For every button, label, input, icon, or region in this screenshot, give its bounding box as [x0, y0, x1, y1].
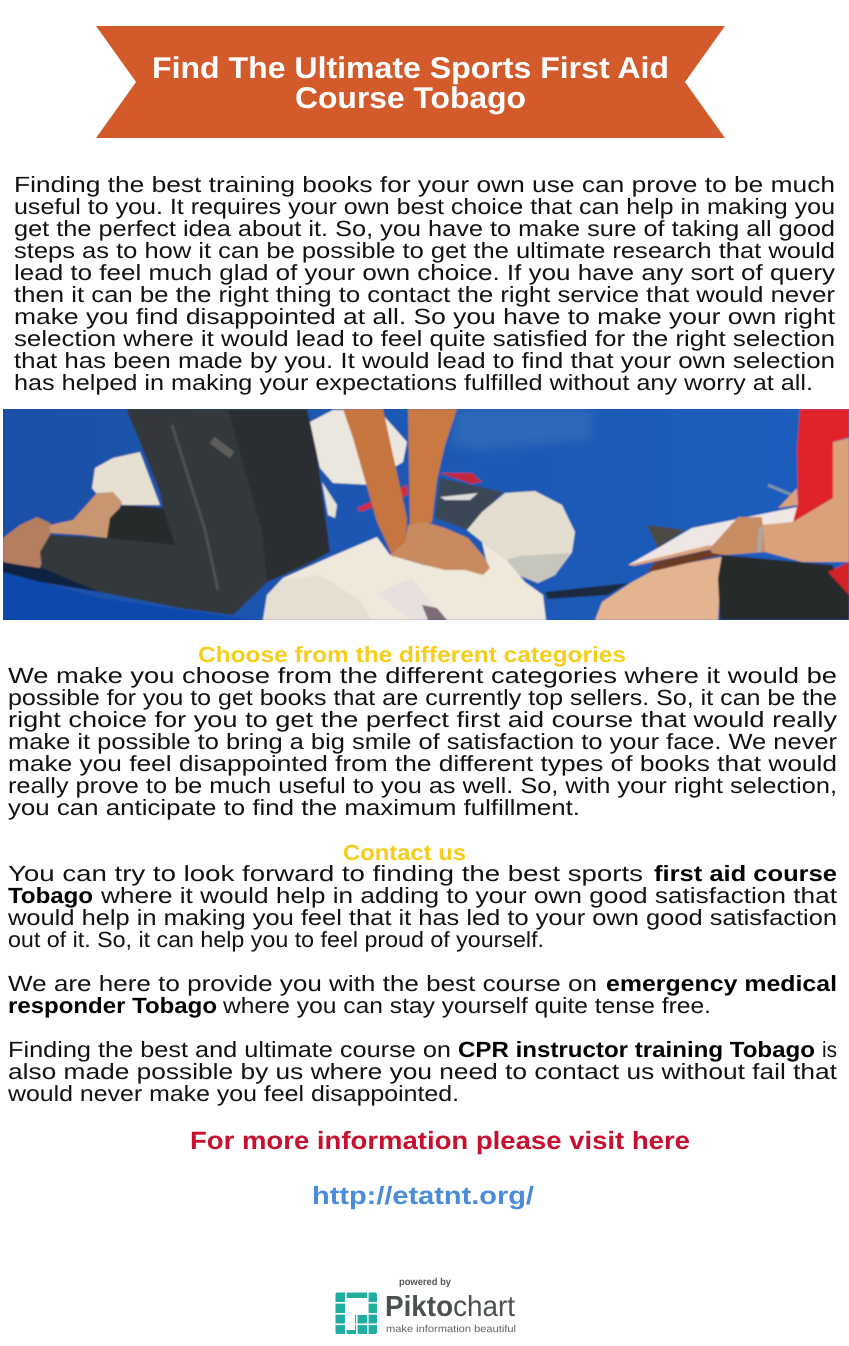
- icon: piktochart squares: [335, 1292, 378, 1335]
- contact paragraph two: responder Tobago: [8, 993, 217, 1018]
- intro paragraph: make you find disappointed at all. So you have to make your own right: [14, 304, 835, 329]
- contact paragraph three: is: [822, 1037, 837, 1062]
- title text: Find The Ultimate Sports First Aid: [152, 52, 669, 85]
- intro paragraph: then it can be the right thing to contact the right service that would never: [14, 282, 835, 307]
- front manikin torso: [263, 537, 546, 620]
- title text: [152, 52, 669, 115]
- contact paragraph one: out of it. So, it can help you to feel proud of yourself.: [8, 927, 544, 952]
- front manikin head: [467, 491, 575, 583]
- fingers on clipboard edge: [778, 488, 798, 508]
- red pad corner: [440, 473, 482, 484]
- intro paragraph: that has been made by you. It would lead to find that your own selection: [14, 348, 835, 373]
- instructor arms: [343, 409, 407, 557]
- black jeans: [40, 409, 330, 615]
- intro paragraph: steps as to how it can be possible to get the ultimate research that would: [14, 238, 835, 263]
- categories paragraph: make you feel disappointed from the different types of books that would: [8, 751, 837, 776]
- intro paragraph: selection where it would lead to feel quite satisfied for the right selection: [14, 326, 835, 351]
- categories paragraph: possible for you to get books that are currently top sellers. So, it can be the: [8, 685, 837, 710]
- dark object under clipboard: [647, 525, 685, 548]
- section heading: contact us: Contact us: [343, 840, 466, 865]
- categories paragraph: [8, 663, 837, 820]
- intro paragraph: lead to feel much glad of your own choice. If you have any sort of query: [14, 260, 835, 285]
- intro paragraph: [14, 172, 835, 395]
- red shirt: [793, 409, 849, 522]
- contact paragraph two: where you can stay yourself quite tense free.: [222, 993, 711, 1018]
- contact paragraph two: [8, 971, 837, 1018]
- title banner: [96, 26, 725, 138]
- website link: http://etatnt.org/: [312, 1182, 534, 1210]
- categories paragraph: right choice for you to get the perfect first aid course that would really: [8, 707, 837, 732]
- categories paragraph: really prove to be much useful to you as well. So, with your right selection,: [8, 773, 837, 798]
- hands on manikin chest: [390, 522, 490, 575]
- shadow under feet: [3, 562, 100, 592]
- title text: Course Tobago: [295, 82, 526, 115]
- contact paragraph two: We are here to provide you with the best course on: [8, 971, 597, 996]
- section heading: categories: Choose from the different categories: [198, 642, 626, 667]
- categories paragraph: We make you choose from the different categories where it would be: [8, 663, 837, 688]
- pen: [768, 485, 792, 495]
- contact paragraph two: emergency medical: [606, 971, 837, 996]
- seated person hand: [710, 517, 765, 555]
- black shorts: [718, 555, 849, 620]
- piktochart wordmark: Piktochart: [385, 1291, 515, 1323]
- contact paragraph one: first aid course: [654, 861, 837, 886]
- categories paragraph: make it possible to bring a big smile of satisfaction to your face. We never: [8, 729, 837, 754]
- contact paragraph three: would never make you feel disappointed.: [7, 1081, 459, 1106]
- seated person arm: [760, 438, 849, 562]
- bare feet: [50, 492, 122, 538]
- contact paragraph one: Tobago: [8, 883, 93, 908]
- contact paragraph three: also made possible by us where you need to contact us without fail that: [8, 1059, 837, 1084]
- banner ribbon shape: [96, 26, 725, 138]
- intro paragraph: Finding the best training books for your own use can prove to be much: [14, 172, 835, 197]
- floor line: [545, 583, 628, 599]
- logo tagline: make information beautiful: [386, 1324, 516, 1335]
- clipboard with papers: [628, 507, 797, 565]
- contact paragraph one: You can try to look forward to finding the best sports: [8, 861, 643, 886]
- photo: CPR training on manikins: [0, 400, 849, 630]
- contact paragraph one: where it would help in adding to your own good satisfaction that: [100, 883, 837, 908]
- intro paragraph: get the perfect idea about it. So, you have to make sure of taking all good: [14, 216, 835, 241]
- contact paragraph three: CPR instructor training Tobago: [458, 1037, 815, 1062]
- seated person leg: [595, 557, 722, 620]
- categories paragraph: you can anticipate to find the maximum fulfillment.: [8, 795, 580, 820]
- intro paragraph: useful to you. It requires your own best choice that can help in making you: [14, 194, 835, 219]
- powered by label: powered by: [399, 1277, 451, 1288]
- rear manikin torso: [92, 452, 160, 505]
- call to action: For more information please visit here: [190, 1127, 690, 1155]
- intro paragraph: has helped in making your expectations fulfilled without any worry at all.: [14, 370, 813, 395]
- rear manikin head: [310, 410, 407, 485]
- red strap on floor: [357, 485, 408, 512]
- blue floor: [0, 400, 849, 630]
- booklet on torso: [379, 579, 433, 620]
- dark pad on manikin: [435, 478, 503, 530]
- piktochart footer logo: [335, 1277, 516, 1335]
- contact paragraph one: [7, 861, 837, 952]
- bracelet: [759, 527, 761, 552]
- contact paragraph three: [7, 1037, 837, 1106]
- contact paragraph three: Finding the best and ultimate course on: [8, 1037, 451, 1062]
- contact paragraph one: would help in making you feel that it has led to your own good satisfaction: [7, 905, 837, 930]
